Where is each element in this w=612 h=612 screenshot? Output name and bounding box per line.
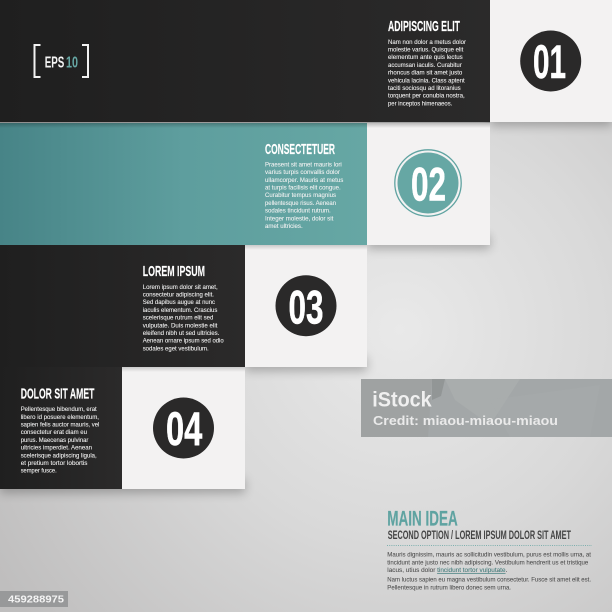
step 1 heading: ADIPISCING ELIT xyxy=(388,18,460,35)
step 4 body text: libero id posuere elementum, xyxy=(21,414,99,421)
main idea title: MAIN IDEA xyxy=(387,507,458,531)
stock number tag xyxy=(0,591,68,607)
panel: step 1 xyxy=(0,0,612,122)
watermark: iStock credit: iStock xyxy=(372,389,432,412)
step 1 body text: accumsan iaculis. Curabitur xyxy=(388,62,462,69)
step 3 number badge: 03 xyxy=(288,280,324,334)
step 3 body text: vulputate. Duis molestie elit xyxy=(143,322,218,329)
step 1 body text: elementum ante quis lectus xyxy=(388,54,463,61)
step 2 body text: pellentesque risus. Aenean xyxy=(265,200,336,207)
main idea body text xyxy=(387,552,591,591)
main idea body text: lacus, utius dolor tincidunt tortor vulputate. xyxy=(387,567,507,574)
step 2 body text: amet ultricies. xyxy=(265,223,303,230)
step 2 heading: CONSECTETUER xyxy=(265,141,335,158)
step 3 white block xyxy=(245,245,367,367)
step 4 body text: et pretium tortor lobortis xyxy=(21,460,88,467)
step 4 number badge xyxy=(153,398,214,458)
step 3 body text: Sed dapibus augue at nunc xyxy=(143,299,216,306)
step 3 body text: sodales eget vestibulum. xyxy=(143,345,209,352)
main idea body text: Nam luctus sapien eu magna vestibulum consectetur. Fusce sit amet elit est. xyxy=(387,577,591,584)
step 2 body text xyxy=(265,161,344,230)
step 2 body text: varius turpis convallis dolor xyxy=(265,169,341,176)
step 4 body text: scelerisque adipiscing ligula, xyxy=(21,452,97,459)
step 3 body text: Aenean ornare ipsum sed odio xyxy=(143,338,224,345)
EPS 10 badge: 10 xyxy=(66,54,78,72)
main idea body text: tincidunt ante justo nec nibh adipiscing. Vestibulum hendrerit us et tristique xyxy=(387,559,589,566)
step 1 white block xyxy=(490,0,612,122)
step 3 body text xyxy=(143,284,224,352)
step 1 body text: Nam non dolor a metus dolor xyxy=(388,39,467,46)
panel: step 3 xyxy=(0,245,367,367)
step 1 dark block xyxy=(0,0,490,122)
step 1 body text: vehicula lacinia. Class aptent xyxy=(388,77,465,84)
main idea body text: Mauris dignissim, mauris ac sollicitudin vestibulum, purus est mollis urna, at xyxy=(387,552,591,559)
step 4 number badge: 04 xyxy=(166,402,202,455)
step 1 body text: taciti sociosqu ad litoranius xyxy=(388,85,461,92)
step 4 body text xyxy=(21,406,100,475)
step 2 body text: Praesent sit amet mauris lori xyxy=(265,161,342,168)
step 1 number badge: 01 xyxy=(533,35,566,88)
step 2 body text: ullamcorper. Mauris at metus xyxy=(265,177,344,184)
step 2 body text: at turpis facilisis elit congue. xyxy=(265,184,341,192)
step 3 body text: Lorem ipsum dolor sit amet, xyxy=(143,284,218,291)
step 4 dark block xyxy=(0,367,122,489)
step 2 teal block xyxy=(0,123,367,245)
step 1 body text xyxy=(388,39,467,107)
step 2 body text: Curabitur tempus magnius xyxy=(265,192,337,199)
main idea body text: Pellentesque in rutrum libero donec sem urna. xyxy=(387,584,511,591)
step 2 body text: sodales tincidunt rutrum. xyxy=(265,208,331,215)
step 4 body text: semper fusce. xyxy=(21,468,57,475)
step 3 body text: consectetur adipiscing elit. xyxy=(143,292,214,298)
step 2 number badge: 02 xyxy=(411,158,446,210)
step 3 number badge xyxy=(276,275,336,336)
watermark: iStock credit xyxy=(361,379,612,437)
step 3 heading: LOREM IPSUM xyxy=(143,263,205,280)
panel: step 4 xyxy=(0,367,245,489)
step 2 body text: Integer molestie, dolor sit xyxy=(265,215,333,222)
step 2 white block xyxy=(367,123,490,245)
EPS 10 badge xyxy=(34,45,88,77)
step 1 body text: rhoncus diam sit amet justo xyxy=(388,70,463,77)
step 4 body text: ultricies imperdiet. Aenean xyxy=(21,445,92,452)
step 1 body text: molestie varius. Quisque elit xyxy=(388,46,463,54)
band shadows xyxy=(0,112,612,493)
step 4 body text: purus. Maecenas pulvinar xyxy=(21,437,89,444)
step 3 dark block xyxy=(0,245,245,367)
step 4 body text: Pellentesque bibendum, erat xyxy=(21,406,97,413)
step 3 body text: iaculis elementum. Crascius xyxy=(143,307,218,314)
step 2 number badge xyxy=(395,150,461,216)
step 1 body text: torquent per conubia nostra, xyxy=(388,93,465,100)
EPS 10 badge: EPS xyxy=(45,54,65,72)
step 3 body text: eleifend nibh ut sed ultricies. xyxy=(143,330,220,337)
step 4 white block xyxy=(122,367,245,489)
step 1 number badge xyxy=(520,30,581,92)
step 4 heading: DOLOR SIT AMET xyxy=(21,386,94,403)
panel: main idea xyxy=(387,507,592,591)
step 4 body text: sapien felis auctor mauris, vel xyxy=(21,422,100,428)
step 1 body text: per inceptos himenaeos. xyxy=(388,100,452,107)
stock number tag: 459288975 xyxy=(8,594,64,606)
watermark: iStock credit: Credit: miaou-miaou-miaou xyxy=(373,414,558,428)
step 4 body text: consectetur erat diam eu xyxy=(21,429,87,436)
panel: step 2 xyxy=(0,122,490,245)
step 3 body text: scelerisque rutrum elit sed xyxy=(143,315,214,322)
